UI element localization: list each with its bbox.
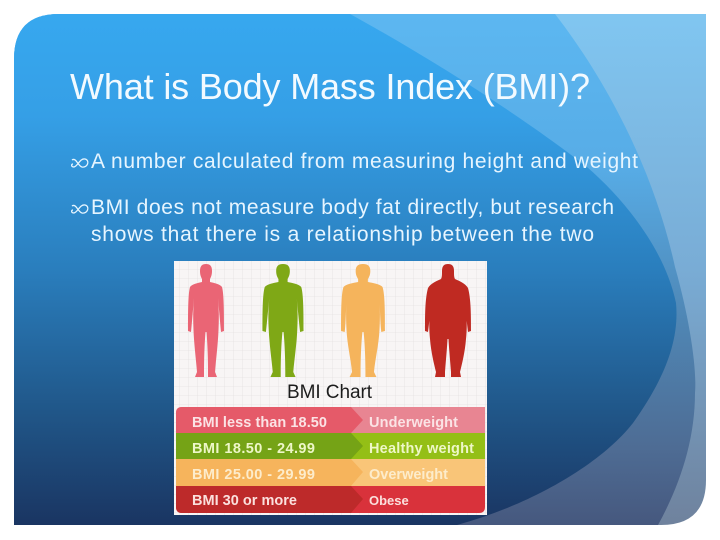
figure: obese (425, 264, 471, 377)
figure: healthy weight (262, 264, 304, 377)
row: obese (176, 486, 485, 513)
row: healthy weight (176, 433, 485, 459)
row: underweight: BMI less than 18.50 (192, 415, 327, 431)
row: overweight: Overweight (369, 467, 448, 483)
row: overweight: BMI 25.00 - 29.99 (192, 467, 315, 483)
row: overweight (176, 459, 485, 486)
BMI chart image (174, 261, 487, 515)
bullet item 1: A number calculated from measuring height and weight (91, 150, 638, 173)
bullet item 2: BMI does not measure body fat directly, but research (91, 196, 614, 219)
row: healthy weight: BMI 18.50 - 24.99 (192, 441, 315, 457)
row: underweight: Underweight (369, 415, 458, 431)
title: What is Body Mass Index (BMI)? (70, 66, 590, 107)
row: underweight (176, 407, 485, 433)
row: obese: BMI 30 or more (192, 493, 297, 509)
row: healthy weight: Healthy weight (369, 441, 474, 457)
figure: overweight (341, 264, 385, 377)
bullet item 2 (72, 196, 614, 246)
chart heading: BMI Chart (287, 382, 373, 403)
figure: underweight (188, 264, 224, 377)
bullet item 2: shows that there is a relationship between the two (91, 223, 594, 246)
row: obese: Obese (369, 493, 409, 508)
bullet list (72, 150, 638, 246)
